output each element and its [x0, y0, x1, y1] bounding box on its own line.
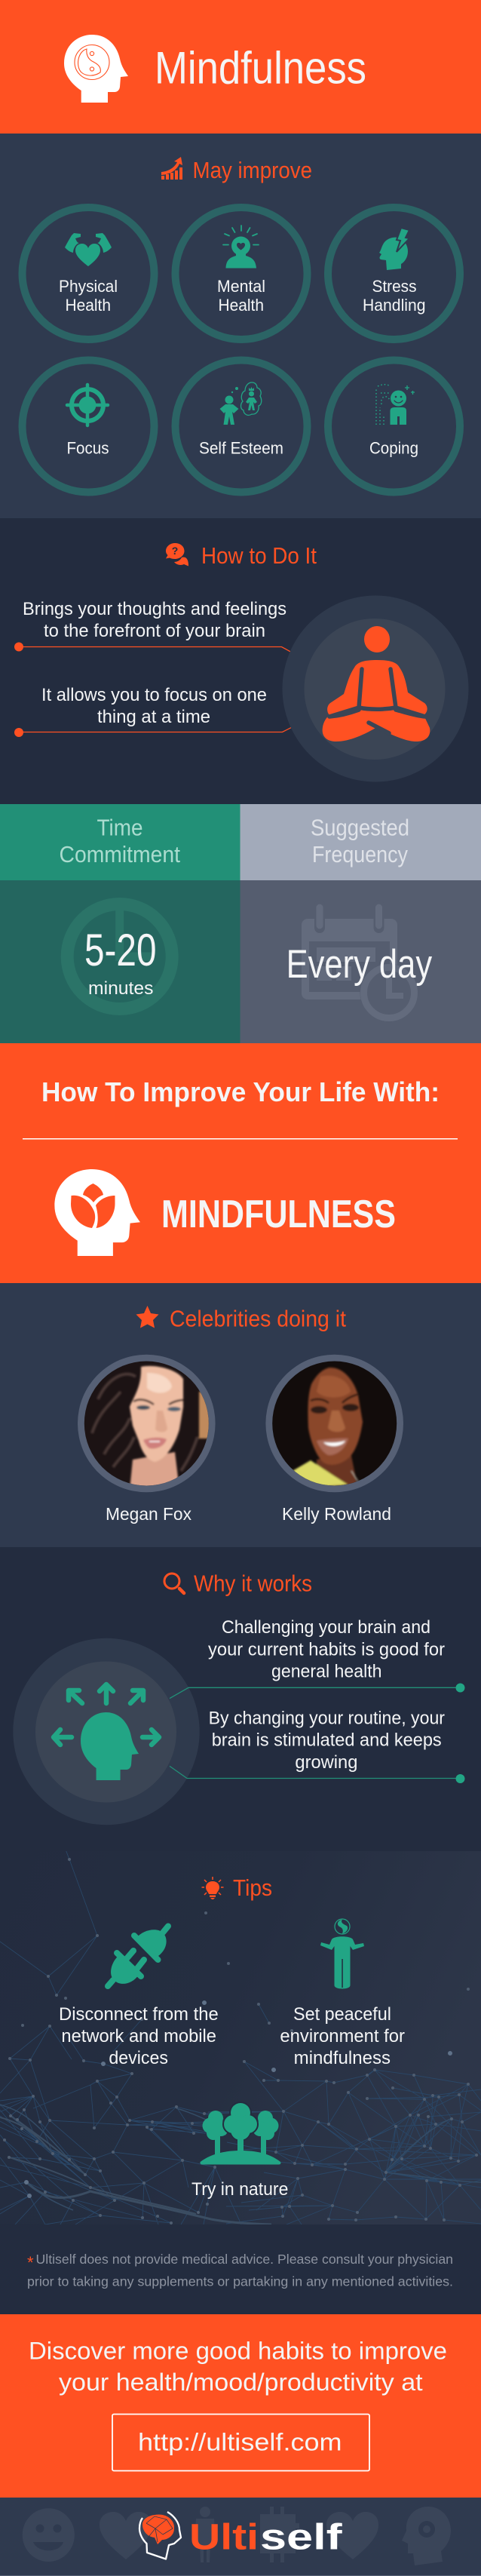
- faint icons: [23, 2507, 451, 2565]
- value: 5-20 minutes: [84, 925, 157, 999]
- panel: why it works: [0, 1547, 481, 1851]
- text: thoughts and feelings: to the forefront of your brain: [44, 621, 265, 641]
- item: coping: [328, 361, 460, 492]
- tip: disconnect: devices: [109, 2048, 168, 2068]
- item: self esteem: Self Esteem: [199, 439, 283, 457]
- callout line 1: [14, 643, 302, 658]
- tip: disconnect: Disconnect from the: [59, 2004, 219, 2025]
- heading: may improve: May improve: [193, 157, 312, 183]
- item: physical health: Health: [65, 296, 111, 315]
- tip: peaceful environment: environment for: [280, 2026, 405, 2046]
- heading: time commitment: Time: [97, 815, 143, 841]
- heading: tips: Tips: [233, 1874, 272, 1901]
- item: mental health: Mental: [217, 277, 265, 296]
- text: focus on one thing: It allows you to focus on one: [41, 685, 267, 705]
- wordmark: mindfulness: MINDFULNESS: [161, 1193, 396, 1236]
- button: website link: [112, 2414, 369, 2471]
- panel: suggested frequency: [240, 804, 481, 1043]
- item: stress handling: Stress: [372, 277, 416, 296]
- text: changing your routine: By changing your routine, your: [209, 1708, 445, 1729]
- panel: may improve: [0, 134, 481, 518]
- heading: time commitment: [59, 815, 180, 867]
- disclaimer text: Ultiself does not provide medical advice. Please consult your physician: [36, 2252, 453, 2267]
- item: mental health: Health: [219, 296, 264, 315]
- tip: try in nature: Try in nature: [191, 2179, 288, 2200]
- text: changing your routine: brain is stimulated and keeps: [212, 1730, 442, 1750]
- callout line 2: [170, 1766, 464, 1783]
- disclaimer text: [27, 2252, 453, 2289]
- heading: suggested frequency: [311, 815, 409, 867]
- heading: how to do it: How to Do It: [201, 542, 317, 569]
- tip: disconnect: [59, 1927, 219, 2068]
- panel: footer: [0, 2498, 481, 2576]
- panel: call to action: [0, 2314, 481, 2498]
- heading: celebrities doing it: Celebrities doing it: [170, 1306, 346, 1332]
- item: stress handling: Handling: [363, 296, 425, 315]
- name: kelly rowland: Kelly Rowland: [282, 1504, 391, 1524]
- text: focus on one thing: [41, 685, 267, 727]
- panel: tips: [0, 1850, 481, 2224]
- panel: header: [0, 0, 481, 134]
- panel: how to do it: [0, 518, 481, 804]
- icon: meditating person: [282, 596, 469, 781]
- logo icon: brain head: [139, 2512, 181, 2559]
- text: challenging your brain: [208, 1617, 445, 1682]
- title: Mindfulness: [155, 42, 366, 94]
- callout line 1: [170, 1684, 464, 1699]
- value: 5-20 minutes: 5-20: [84, 925, 157, 975]
- logo wordmark: self: [260, 2518, 343, 2558]
- item: physical health: [23, 207, 154, 339]
- button: website link: http://ultiself.com: [138, 2429, 342, 2456]
- item: mental health: [175, 207, 308, 339]
- tip: try in nature: [191, 2103, 288, 2200]
- icon: head with yin yang: [64, 35, 128, 103]
- panel: time commitment: [0, 804, 240, 1043]
- text: focus on one thing: thing at a time: [97, 707, 210, 727]
- heading: time commitment: Commitment: [59, 841, 180, 867]
- text: changing your routine: growing: [295, 1752, 357, 1773]
- icon: person with yin yang: [320, 1919, 364, 1988]
- panel: how to improve: [0, 1043, 481, 1283]
- logo wordmark: [189, 2518, 343, 2558]
- item: physical health: Physical: [59, 277, 118, 296]
- logo wordmark: Ulti: [189, 2518, 259, 2558]
- heading: why it works: Why it works: [194, 1570, 312, 1596]
- photo: megan fox: [78, 1355, 216, 1492]
- icon: plug: [108, 1927, 168, 1986]
- heading: how to do it: ?: [172, 545, 178, 557]
- icon: trees: [200, 2103, 280, 2165]
- asterisk: *: [27, 2253, 34, 2272]
- heading: suggested frequency: Frequency: [312, 841, 408, 867]
- tip: peaceful environment: [280, 1919, 405, 2068]
- disclaimer text: prior to taking any supplements or partaking in any mentioned activities.: [27, 2274, 453, 2289]
- value: every day: Every day: [286, 942, 433, 987]
- text: challenging your brain: Challenging your brain and: [222, 1617, 430, 1638]
- item: coping: Coping: [369, 439, 418, 457]
- panel: celebrities: [0, 1283, 481, 1547]
- value: 5-20 minutes: minutes: [88, 978, 154, 999]
- item: focus: [23, 361, 154, 492]
- tip: peaceful environment: mindfulness: [294, 2048, 391, 2068]
- text: challenging your brain: your current habits is good for: [208, 1639, 445, 1660]
- text: challenging your brain: general health: [271, 1661, 381, 1682]
- icon: head with lotus: [54, 1169, 140, 1256]
- text: thoughts and feelings: [23, 599, 286, 641]
- text: discover more: your health/mood/productivity at: [59, 2369, 423, 2396]
- heading: how to improve your life: How To Improve Your Life With:: [41, 1076, 440, 1107]
- text: changing your routine: [209, 1708, 445, 1773]
- tip: disconnect: network and mobile: [61, 2026, 216, 2046]
- item: stress handling: [328, 207, 460, 339]
- text: discover more: [29, 2337, 447, 2396]
- item: focus: Focus: [66, 439, 109, 457]
- icon: clock: [67, 904, 172, 1009]
- photo: kelly rowland: [265, 1355, 403, 1492]
- icon: head with arrows: [13, 1638, 200, 1825]
- callout line 2: [14, 720, 305, 737]
- text: discover more: Discover more good habits to improve: [29, 2337, 447, 2364]
- tip: peaceful environment: Set peaceful: [293, 2004, 391, 2025]
- panel: disclaimer: [0, 2224, 481, 2314]
- text: thoughts and feelings: Brings your thoughts and feelings: [23, 599, 286, 619]
- network background: [0, 1850, 481, 2224]
- heading: suggested frequency: Suggested: [311, 815, 409, 841]
- item: self esteem: [175, 361, 308, 492]
- icon: calendar with clock: [302, 905, 418, 1021]
- heading: tips: [202, 1874, 272, 1901]
- name: megan fox: Megan Fox: [106, 1504, 191, 1524]
